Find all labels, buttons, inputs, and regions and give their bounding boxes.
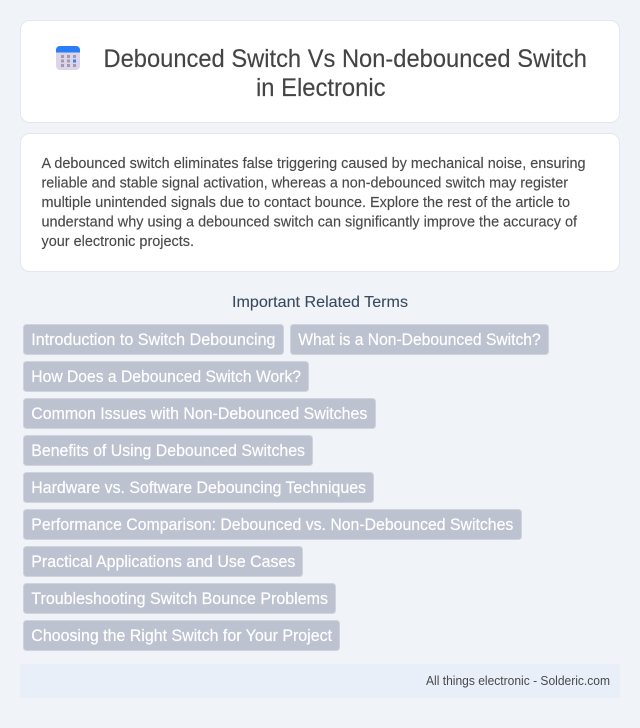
tag: troubleshooting: Troubleshooting Switch Bounce Problems xyxy=(31,589,328,608)
tag: hardware vs software xyxy=(24,472,374,502)
intro paragraph: your electronic projects. xyxy=(42,233,194,250)
tag: common issues: Common Issues with Non-Debounced Switches xyxy=(31,404,367,423)
tag: benefits xyxy=(24,436,312,466)
intro paragraph: reliable and stable signal activation, whereas a non-debounced switch may register xyxy=(42,174,568,192)
footer xyxy=(20,664,620,698)
tag: troubleshooting xyxy=(24,584,336,614)
tag: choosing the right switch: Choosing the Right Switch for Your Project xyxy=(31,626,332,645)
tag: introduction: Introduction to Switch Debouncing xyxy=(31,330,275,349)
intro paragraph: multiple unintended signals due to contact bounce. Explore the rest of the article to xyxy=(42,194,570,211)
icon: calendar xyxy=(56,46,80,70)
tag: practical applications xyxy=(24,546,302,576)
title: in Electronic xyxy=(256,74,386,102)
tag: how it works xyxy=(24,362,308,392)
footer: All things electronic - Solderic.com xyxy=(426,674,610,688)
heading: important related terms: Important Related Terms xyxy=(232,294,408,311)
tag: how it works: How Does a Debounced Switch Work? xyxy=(31,367,301,386)
intro paragraph: A debounced switch eliminates false triggering caused by mechanical noise, ensuring xyxy=(42,155,586,172)
title xyxy=(104,45,587,102)
tag: hardware vs software: Hardware vs. Software Debouncing Techniques xyxy=(31,478,366,497)
tag: what is non-debounced: What is a Non-Debounced Switch? xyxy=(298,330,541,349)
intro paragraph xyxy=(42,155,586,250)
tag: benefits: Benefits of Using Debounced Switches xyxy=(31,441,305,460)
panel: intro text card xyxy=(20,134,620,272)
tag: what is non-debounced xyxy=(290,324,548,354)
tag: practical applications: Practical Applications and Use Cases xyxy=(31,552,295,571)
tag: common issues xyxy=(24,398,376,428)
title: Debounced Switch Vs Non-debounced Switch xyxy=(104,45,587,73)
tag: performance comparison xyxy=(24,510,522,540)
tag: introduction xyxy=(24,324,284,354)
tag: choosing the right switch xyxy=(24,620,340,650)
panel: title card xyxy=(20,20,620,122)
tag: performance comparison: Performance Comparison: Debounced vs. Non-Debounced Switches xyxy=(31,515,513,534)
intro paragraph: understand why using a debounced switch can significantly improve the accuracy of xyxy=(42,214,578,230)
